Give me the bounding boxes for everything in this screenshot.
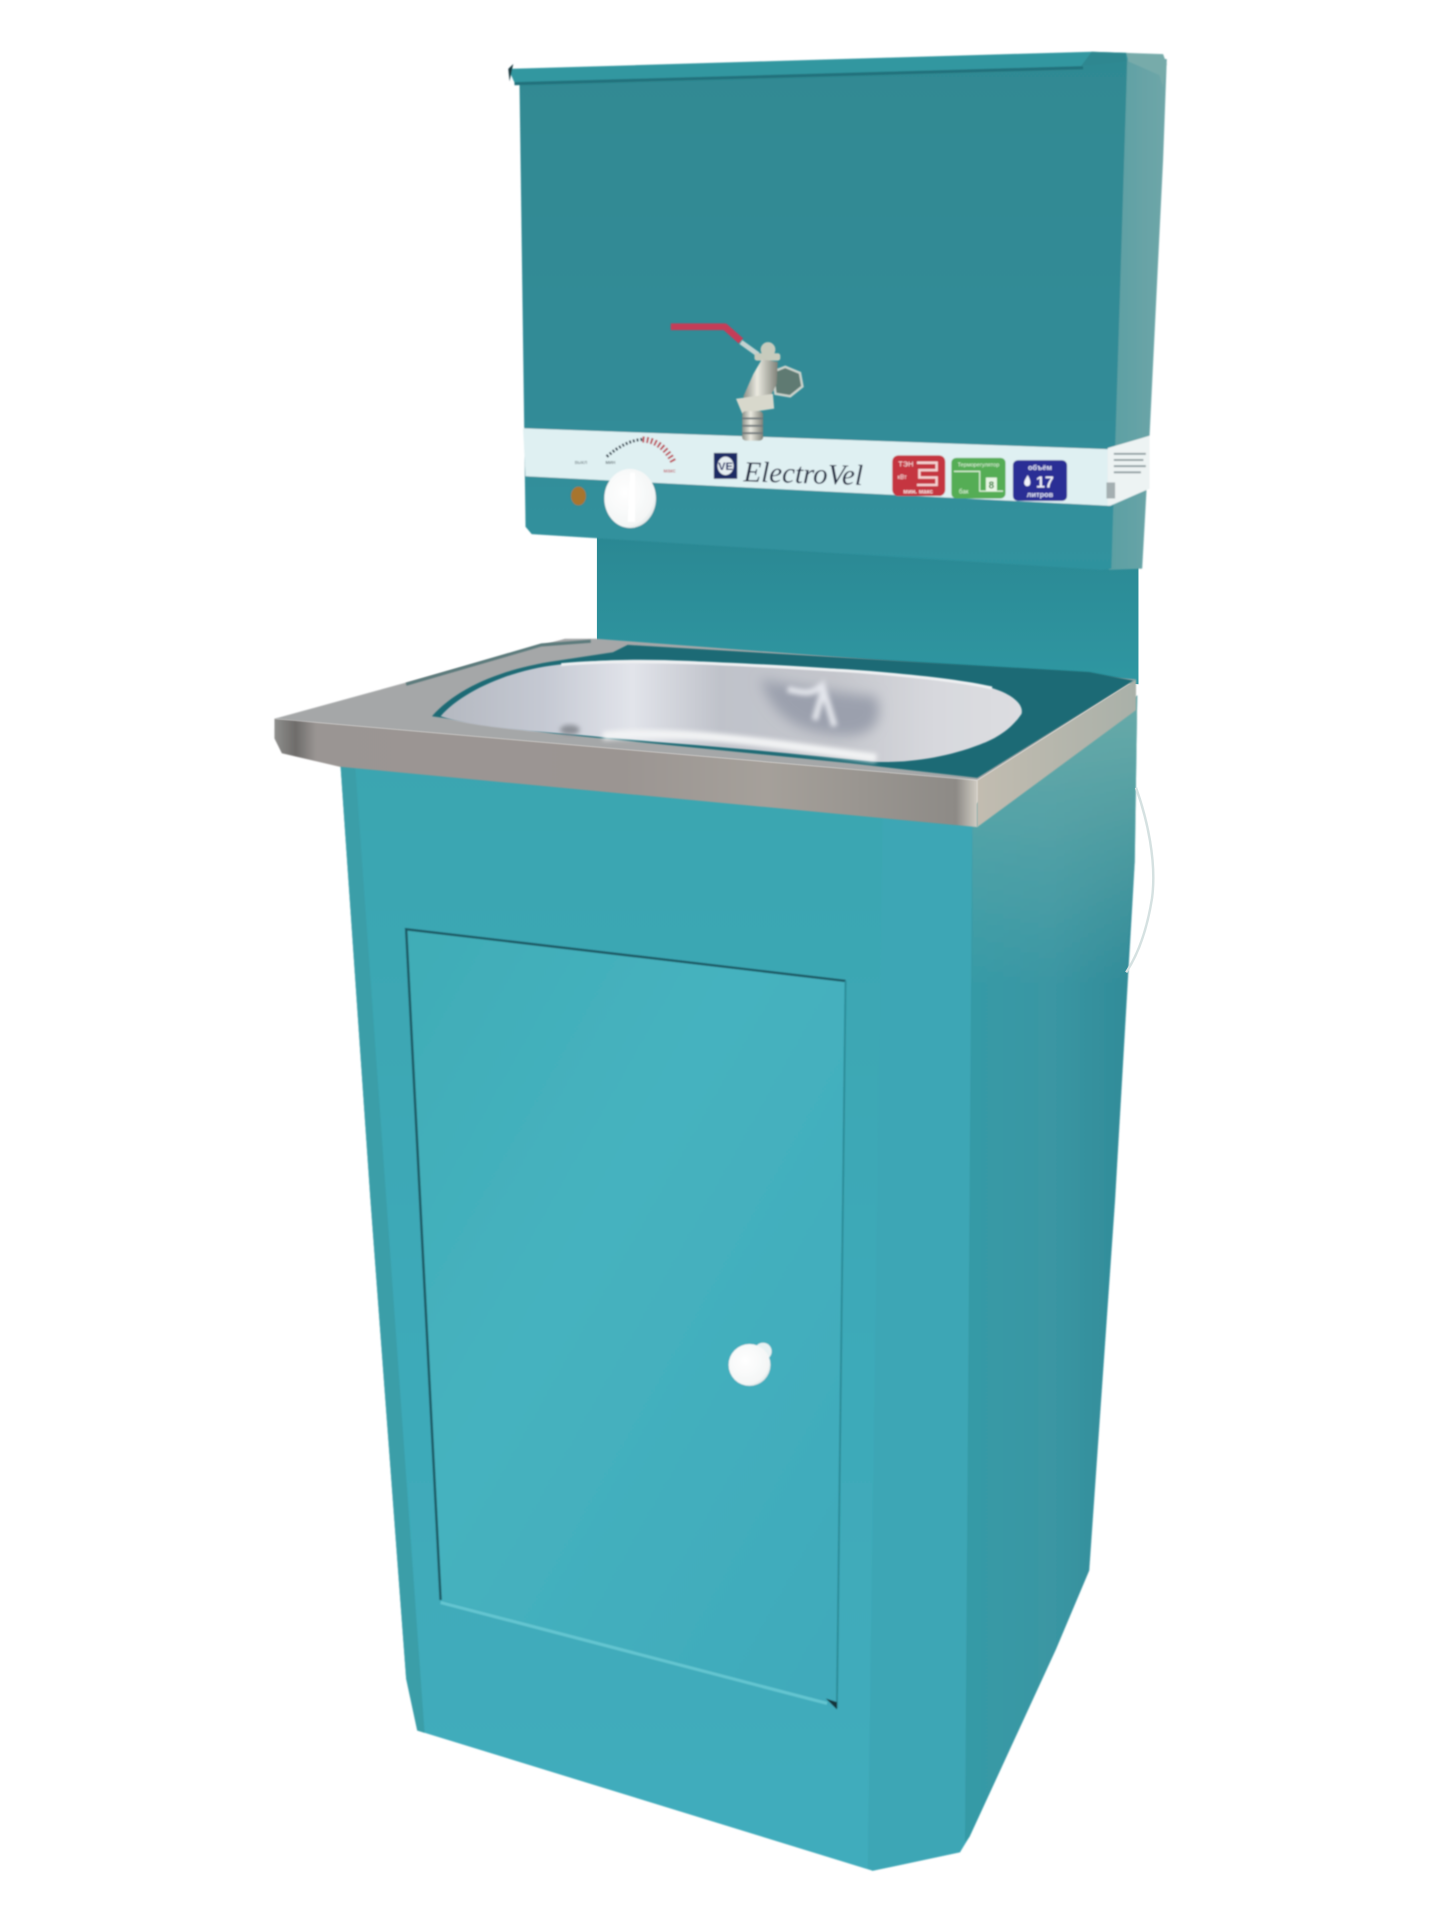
cabinet left strip	[340, 753, 425, 1733]
cabinet chamfer	[868, 818, 980, 1871]
temperature gauge	[575, 439, 676, 475]
brand logo	[714, 453, 737, 479]
red badge: heater: кВт	[897, 474, 907, 481]
blue badge: volume 17 litres: 17	[1036, 474, 1054, 491]
door	[406, 929, 846, 1710]
green badge: thermostat	[951, 458, 1006, 498]
red badge: heater: мин. макс	[903, 489, 934, 496]
cabinet front face	[340, 753, 985, 1871]
back panel	[597, 529, 1138, 684]
counter top	[274, 639, 1136, 780]
tap valve head	[754, 342, 780, 361]
counter front edge	[274, 719, 977, 827]
temperature gauge: мин	[606, 460, 615, 466]
basin	[441, 660, 1022, 762]
counter dark reflection	[432, 645, 1134, 778]
thermostat knob	[604, 469, 656, 528]
red badge: heater	[892, 455, 945, 496]
power cord	[1126, 788, 1153, 972]
blue badge: volume 17 litres: объём	[1028, 463, 1052, 472]
tank front	[519, 54, 1127, 570]
temperature gauge: выкл	[575, 460, 587, 466]
green badge: thermostat: Терморегулятор	[958, 462, 999, 468]
green badge: thermostat: 8	[989, 481, 995, 492]
indicator lamp	[570, 486, 586, 506]
temperature gauge: макс	[663, 469, 676, 475]
red badge: heater: ТЭН	[898, 459, 913, 468]
blue badge: volume 17 litres: литров	[1027, 490, 1054, 499]
cabinet	[340, 695, 1137, 1871]
counter right edge	[977, 679, 1136, 827]
tap flange nut	[773, 367, 802, 396]
water tank	[508, 52, 1167, 570]
tank lid	[508, 52, 1167, 87]
tank band	[523, 428, 1150, 506]
door knob	[729, 1343, 772, 1386]
tap spout	[742, 411, 763, 441]
brand name: ElectroVel	[742, 456, 863, 492]
cabinet side face	[965, 695, 1137, 1842]
brand logo: VE	[718, 461, 733, 473]
tap handle	[671, 327, 741, 341]
sink counter	[274, 639, 1136, 827]
tank side	[1109, 57, 1167, 570]
side label	[1106, 453, 1146, 498]
green badge: thermostat: бак	[959, 489, 969, 496]
blue badge: volume 17 litres	[1013, 460, 1067, 501]
counter groove	[406, 641, 591, 684]
tap body	[743, 359, 778, 404]
water tap	[671, 327, 802, 441]
